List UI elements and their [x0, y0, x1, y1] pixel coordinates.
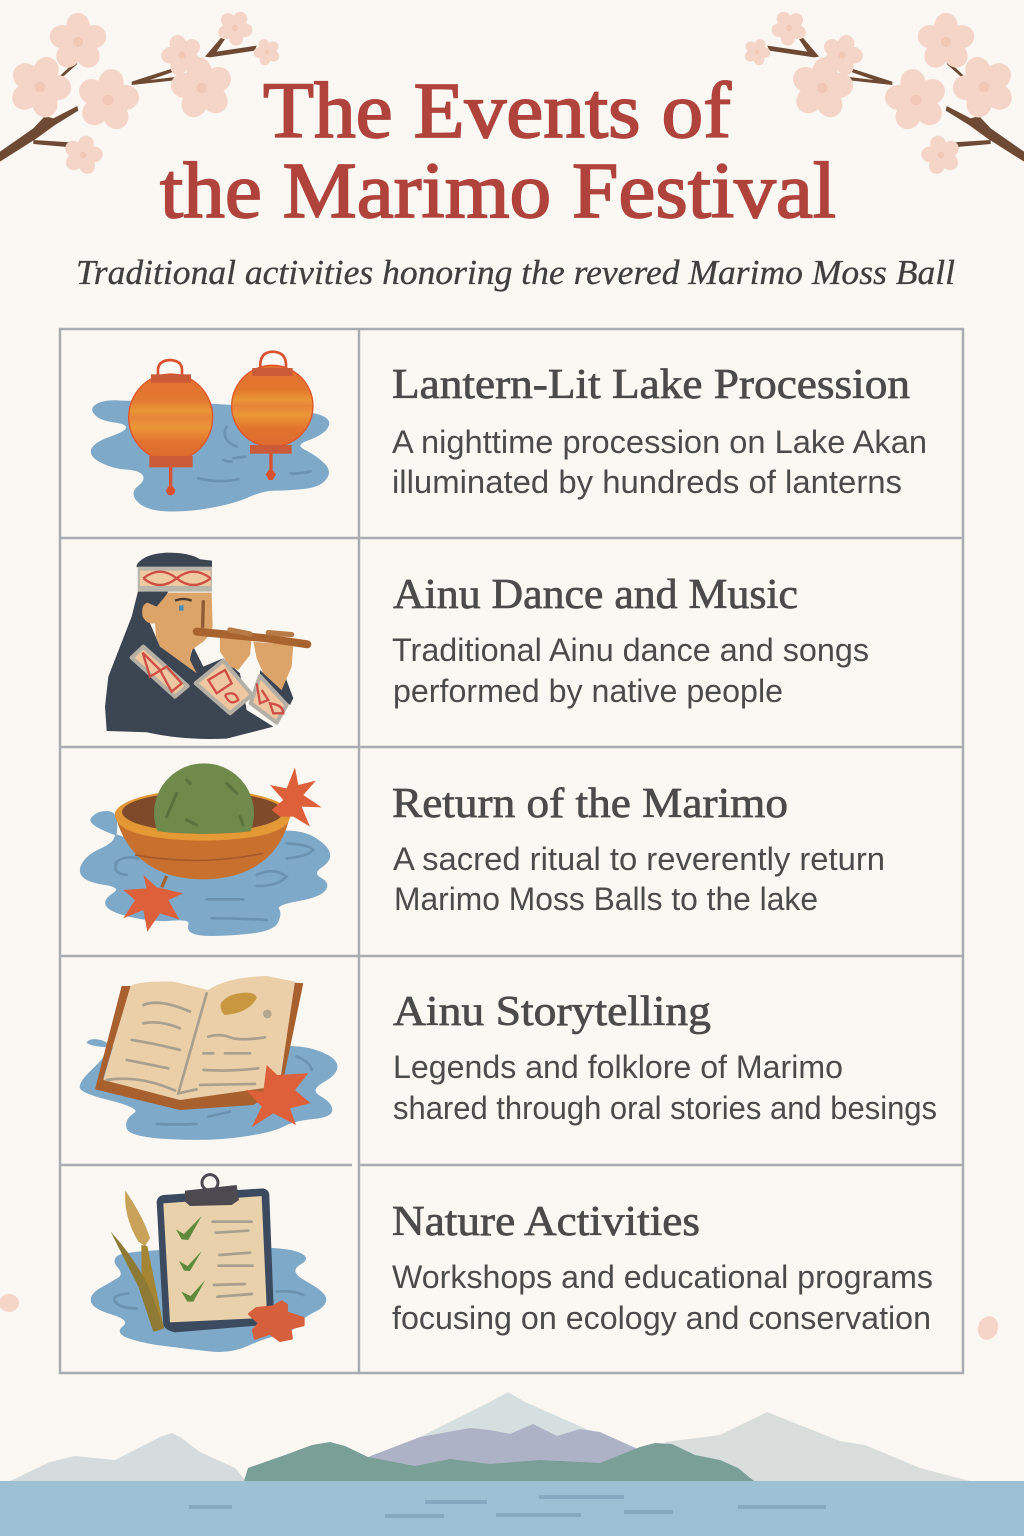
mountain: far right: [665, 1412, 970, 1481]
reeds: [111, 1191, 164, 1332]
icon: Ainu flute player: [105, 553, 307, 739]
table grid: [60, 329, 963, 1373]
maple leaf: [246, 1065, 311, 1127]
title: The Events of: [263, 68, 732, 155]
book cover: [95, 983, 303, 1110]
headband: [138, 567, 212, 592]
lake: [0, 1481, 1024, 1536]
red flower: [249, 1302, 303, 1341]
landscape: mountains and lake: [0, 1392, 1024, 1536]
decoration: cherry blossoms top left: [0, 3, 287, 180]
description: Ainu Storytelling: shared through oral stories and besings: [393, 1090, 937, 1126]
decoration: cherry blossoms top right: [737, 3, 1024, 180]
clipboard: [157, 1188, 274, 1332]
description: Ainu Storytelling: Legends and folklore of Marimo: [393, 1049, 843, 1085]
icon: lanterns on lake: [91, 352, 329, 511]
description: Ainu Storytelling: [393, 1049, 937, 1126]
lantern right: [232, 352, 313, 480]
icon: open storybook: [80, 976, 337, 1139]
sash panels: [132, 647, 287, 723]
description: Return of the Marimo: Marimo Moss Balls to the lake: [394, 881, 818, 917]
heading: Lantern-Lit Lake Procession: Lantern-Lit Lake Procession: [392, 362, 910, 408]
subtitle: Traditional activities honoring the revered Marimo Moss Ball: [76, 253, 955, 292]
description: Lantern-Lit Lake Procession: A nighttime procession on Lake Akan: [392, 424, 927, 460]
title: [160, 68, 836, 235]
decoration: falling petals: [0, 1294, 1002, 1343]
mountain: purple range: [368, 1424, 640, 1470]
icon: marimo in bowl: [81, 763, 330, 935]
heading: Return of the Marimo: Return of the Marimo: [392, 781, 788, 827]
description: Lantern-Lit Lake Procession: [392, 424, 927, 500]
heading: Ainu Storytelling: Ainu Storytelling: [393, 989, 711, 1035]
maple leaves: [123, 767, 322, 932]
mountain: left: [10, 1433, 246, 1481]
island: green: [244, 1442, 754, 1481]
heading: Ainu Dance and Music: Ainu Dance and Music: [393, 572, 798, 618]
flute: [197, 632, 307, 644]
icon: checklist clipboard with reeds: [91, 1175, 326, 1351]
description: Ainu Dance and Music: performed by native people: [393, 673, 783, 709]
description: Return of the Marimo: [393, 841, 885, 917]
description: Nature Activities: [392, 1259, 933, 1336]
book pages: [103, 976, 295, 1100]
description: Nature Activities: focusing on ecology and conservation: [392, 1300, 931, 1336]
description: Lantern-Lit Lake Procession: illuminated by hundreds of lanterns: [392, 464, 902, 500]
mountain: centre peak: [420, 1392, 600, 1450]
description: Return of the Marimo: A sacred ritual to reverently return: [393, 841, 885, 877]
description: Ainu Dance and Music: [392, 632, 869, 709]
title: the Marimo Festival: [160, 148, 836, 235]
description: Nature Activities: Workshops and educational programs: [392, 1259, 933, 1295]
bowl and moss ball: [115, 763, 291, 879]
description: Ainu Dance and Music: Traditional Ainu dance and songs: [392, 632, 869, 668]
heading: Nature Activities: Nature Activities: [392, 1199, 700, 1245]
lantern left: [129, 360, 213, 495]
check marks: [176, 1216, 205, 1302]
